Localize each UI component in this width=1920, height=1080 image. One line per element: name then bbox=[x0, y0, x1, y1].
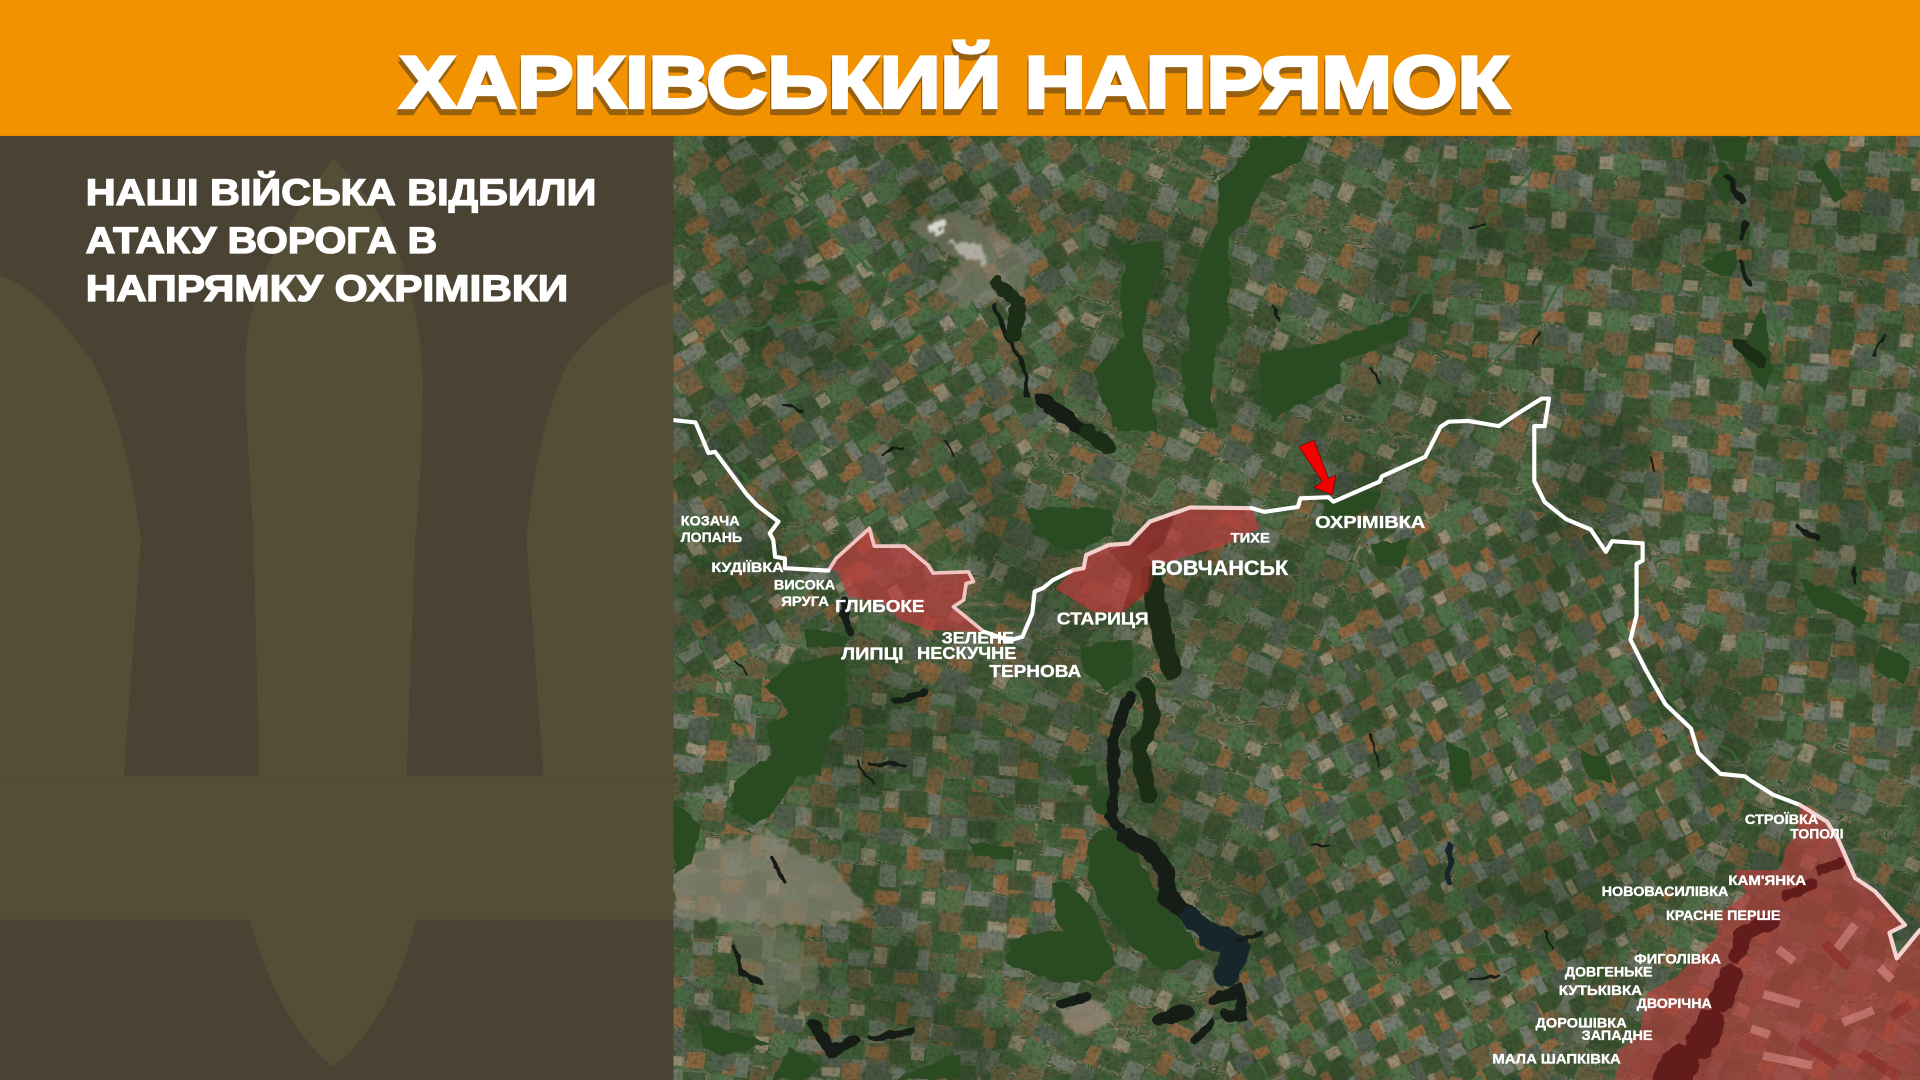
label: Zelene: ЗЕЛЕНЕ bbox=[942, 628, 1014, 647]
label: Neskuchne: НЕСКУЧНЕ bbox=[917, 643, 1016, 663]
arrow: enemy attack direction towards Okhrimivka bbox=[1299, 440, 1336, 495]
red zone: occupied territory in the south-east bbox=[1614, 804, 1920, 1080]
white contact line bbox=[672, 399, 1920, 958]
label: Krasne Pershe: КРАСНЕ ПЕРШЕ bbox=[1666, 908, 1780, 924]
label: Liptsi: ЛИПЦІ bbox=[841, 643, 904, 663]
label: Zapadne: ЗАПАДНЕ bbox=[1582, 1028, 1652, 1044]
left panel background bbox=[0, 136, 673, 1080]
label: Kozacha Lopan: КОЗАЧА bbox=[681, 512, 740, 528]
title: ХАРКІВСЬКИЙ НАПРЯМОК bbox=[399, 42, 1509, 126]
panel text: main message: НАШІ ВІЙСЬКА ВІДБИЛИ bbox=[86, 171, 596, 213]
label: Kozacha Lopan: ЛОПАНЬ bbox=[681, 529, 742, 545]
forests bbox=[673, 137, 1910, 1080]
satellite map bbox=[672, 136, 1920, 1080]
label: Tykhe: ТИХЕ bbox=[1231, 530, 1270, 545]
red zone: occupied territory near Vovchansk bbox=[1056, 507, 1260, 613]
urban areas bbox=[673, 209, 1114, 1035]
label: Fyholivka: ФИГОЛІВКА bbox=[1634, 951, 1721, 967]
settlement labels bbox=[681, 512, 1843, 1067]
panel text: main message: АТАКУ ВОРОГА В bbox=[86, 220, 437, 261]
label: Vysoka Yaruha: ВИСОКА bbox=[774, 577, 835, 593]
label: Okhrimivka: ОХРІМІВКА bbox=[1315, 512, 1425, 532]
label: Vovchansk: ВОВЧАНСЬК bbox=[1151, 557, 1288, 580]
title: ХАРКІВСЬКИЙ НАПРЯМОК bbox=[399, 45, 1508, 129]
label: Mala Shapkivka: МАЛА ШАПКІВКА bbox=[1492, 1051, 1621, 1067]
red zone: occupied territory near Hlyboke bbox=[828, 528, 984, 632]
tree lines and roads bbox=[698, 159, 1920, 980]
label: Vysoka Yaruha: ЯРУГА bbox=[781, 593, 829, 609]
label: Kudiivka: КУДІЇВКА bbox=[711, 559, 784, 575]
label: Novovasylivka: НОВОВАСИЛІВКА bbox=[1602, 884, 1728, 900]
trident emblem watermark bbox=[0, 158, 673, 1067]
panel text: main message bbox=[86, 171, 596, 309]
label: Dvorichna: ДВОРІЧНА bbox=[1637, 996, 1712, 1012]
label: Vysoka Yaruha bbox=[774, 580, 835, 606]
header banner bbox=[0, 0, 1920, 136]
panel text: main message: НАПРЯМКУ ОХРІМІВКИ bbox=[86, 268, 568, 309]
label: Kutkivka: КУТЬКІВКА bbox=[1559, 983, 1642, 999]
label: Kozacha Lopan bbox=[680, 516, 742, 542]
map base texture: agricultural fields bbox=[673, 136, 1920, 1080]
title: ХАРКІВСЬКИЙ НАПРЯМОК bbox=[400, 39, 1509, 123]
label: Topoli: ТОПОЛІ bbox=[1790, 826, 1843, 842]
label: Kamianka: КАМ'ЯНКА bbox=[1728, 873, 1806, 889]
label: Doroshivka: ДОРОШІВКА bbox=[1536, 1015, 1627, 1031]
label: Hlyboke: ГЛИБОКЕ bbox=[835, 596, 924, 616]
rivers and reservoirs bbox=[735, 176, 1886, 1053]
label: Dovhenke: ДОВГЕНЬКЕ bbox=[1565, 965, 1652, 981]
label: Starytsia: СТАРИЦЯ bbox=[1057, 608, 1149, 628]
label: Ternova: ТЕРНОВА bbox=[989, 661, 1081, 681]
label: Stroivka: СТРОЇВКА bbox=[1745, 811, 1818, 828]
